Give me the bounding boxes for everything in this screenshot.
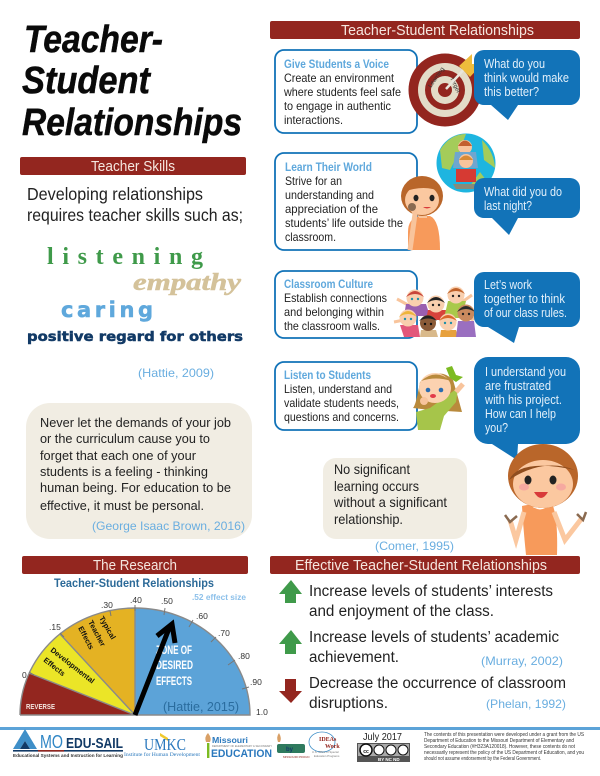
logo: IDEAs at Work: Education Programs — [314, 754, 340, 758]
panel: listen to students: validate students needs, — [284, 396, 399, 410]
panel: give students a voice: interactions. — [284, 113, 343, 127]
gauge chart: DESIRED — [156, 660, 193, 672]
gauge chart: Effects — [42, 655, 67, 678]
panel: give students a voice — [275, 50, 417, 133]
title: Student — [22, 60, 151, 102]
panel: George Isaac Brown quote: forget that each one of your — [40, 448, 197, 463]
heading: teacher-student relationships: Teacher-Student Relationships — [341, 23, 534, 39]
license badge: cc — [363, 749, 369, 755]
effect: interest: and enjoyment of the class. — [309, 603, 494, 620]
logo: IDEAs at Work: Work — [325, 744, 340, 750]
panel: learn their world: Learn Their World — [285, 162, 372, 174]
citation: Murray 2002: (Murray, 2002) — [481, 654, 563, 668]
logo: IDEAs at Work: U.S. Office of Special — [312, 750, 339, 754]
gauge chart: .70 — [218, 628, 230, 638]
panel: listen to students — [275, 362, 417, 430]
word: empathy: empathy — [133, 270, 241, 296]
effect: disruptions: Decrease the occurrence of classroom — [309, 675, 566, 692]
gauge chart: REVERSE — [26, 702, 55, 711]
speech bubble: class rules: together to think — [484, 292, 566, 306]
title: Teacher- — [24, 19, 163, 61]
gauge chart: Typical — [97, 614, 118, 641]
word: caring: caring — [61, 298, 153, 322]
panel: give students a voice: to engage in authentic — [284, 99, 391, 113]
panel: classroom culture: Establish connections — [284, 291, 387, 305]
disclaimer: The contents of this presentation were developed under a grant from the US — [424, 732, 585, 738]
heading: the research: The Research — [93, 558, 177, 574]
gauge chart: .80 — [238, 651, 250, 661]
panel: classroom culture: Classroom Culture — [284, 279, 373, 291]
heading: the research — [22, 556, 248, 574]
heading: effective relationships: Effective Teacher-Student Relationships — [295, 558, 547, 574]
panel: Comer quote: No significant — [334, 461, 410, 477]
panel: George Isaac Brown quote — [26, 403, 252, 539]
logo: Missouri Education: Missouri — [212, 736, 248, 745]
gauge chart: Developmental — [49, 645, 96, 685]
logo: MO EDU-SAIL — [13, 729, 123, 758]
citation: Phelan 1992: (Phelan, 1992) — [486, 697, 566, 711]
disclaimer — [424, 732, 585, 762]
speech bubble: what do you think — [474, 50, 580, 120]
logo: MO EDU-SAIL: Educational Systems and Instruction for Learning — [13, 753, 123, 758]
panel: give students a voice: Create an environment — [284, 71, 395, 85]
title: Relationships — [22, 102, 242, 144]
logo: UMKC: Institute for Human Development — [124, 751, 200, 758]
panel: George Isaac Brown quote: human being. For education to be — [40, 480, 231, 495]
illustration: teacher with open hands — [505, 444, 586, 555]
panel: Comer quote: learning occurs — [334, 478, 419, 494]
panel: effective teacher-student relationships — [270, 556, 580, 712]
logo: MO EDU-SAIL: EDU-SAIL — [66, 735, 123, 752]
logo: IDEAs at Work — [309, 732, 340, 758]
illustration: group of children — [394, 286, 479, 337]
gauge chart: Effects — [76, 625, 96, 651]
speech bubble: class rules: Let’s work — [484, 278, 533, 292]
gauge chart: .50 — [161, 596, 173, 606]
effect: achievement — [309, 629, 559, 666]
effect: interest: Increase levels of students’ interests — [309, 583, 553, 600]
logo: Missouri Education: EDUCATION — [211, 748, 272, 760]
logo: Missouri Education — [205, 733, 272, 760]
effect: achievement: achievement. — [309, 649, 399, 666]
intro text: requires teacher skills such as; — [27, 205, 243, 225]
speech bubble: class rules: of our class rules. — [484, 306, 567, 320]
title — [22, 19, 242, 144]
speech bubble: frustrated: How can I help — [485, 407, 556, 421]
logo: Missouri Education: DEPARTMENT OF ELEMENTARY & SECONDARY — [212, 744, 272, 748]
panel: classroom culture: the classroom walls. — [284, 319, 380, 333]
heading: teacher skills: Teacher Skills — [91, 159, 175, 175]
intro text: Developing relationships — [27, 184, 203, 204]
gauge chart: Teacher — [86, 619, 107, 648]
illustration: girl with raised hand — [413, 366, 463, 430]
footer logos — [13, 729, 340, 760]
effect: disruptions: disruptions. — [309, 695, 388, 712]
speech bubble: class rules — [474, 272, 580, 343]
icon: up arrow interest — [279, 580, 302, 603]
panel: learn their world: Strive for an — [285, 174, 342, 188]
panel: give students a voice: Give Students a Voice — [284, 59, 389, 71]
gauge chart: 1.0 — [256, 707, 268, 717]
effect: disruptions — [309, 675, 566, 712]
panel: Comer quote — [323, 458, 467, 553]
icon: globe with parent and child reading — [436, 134, 496, 192]
word: listening: listening — [47, 244, 203, 270]
icon: up arrow achievement — [279, 630, 302, 654]
speech bubble: what do you think: this better? — [484, 85, 539, 99]
logo: 1 by 20 partner — [277, 733, 310, 759]
panel: George Isaac Brown quote: students is a feeling - thinking — [40, 464, 208, 479]
panel: classroom culture — [275, 271, 417, 338]
disclaimer: necessarily represent the policy of the US Department of Education, and you — [424, 750, 584, 756]
intro text — [27, 184, 243, 225]
panel: Comer quote: without a significant — [333, 494, 447, 510]
gauge chart: EFFECTS — [156, 676, 192, 688]
gauge chart: .90 — [250, 677, 262, 687]
panel: George Isaac Brown quote: effective, it must be personal. — [40, 498, 204, 513]
effect: interest — [309, 583, 553, 620]
panel: teacher skills — [20, 157, 246, 380]
panel: George Isaac Brown quote: (George Isaac Brown, 2016) — [92, 519, 245, 533]
gauge chart: ZONE OF — [156, 645, 192, 657]
panel: learn their world — [275, 153, 417, 250]
license badge: BY NC ND — [378, 757, 400, 762]
speech bubble: what do you think: What do you — [484, 57, 545, 71]
illustration: teacher thinking — [401, 176, 443, 250]
icon: target with arrow — [408, 54, 482, 126]
effect size note: .52 effect size — [192, 592, 246, 602]
speech bubble: frustrated: you? — [485, 421, 508, 435]
effect: achievement: Increase levels of students’ academic — [309, 629, 559, 646]
panel: George Isaac Brown quote: Never let the demands of your job — [40, 415, 231, 430]
speech bubble: what did you do — [474, 178, 580, 235]
logo: UMKC: UMKC — [144, 735, 186, 754]
panel: learn their world: appreciation of the — [285, 202, 378, 216]
logo: 1 by 20 partner: by — [286, 747, 294, 753]
speech bubble: frustrated: I understand you — [485, 365, 566, 379]
speech bubble: what do you think: think would make — [484, 71, 569, 85]
gauge chart: (Hattie, 2015) — [163, 699, 239, 714]
speech bubble: what did you do: What did you do — [484, 185, 562, 199]
license badge — [357, 743, 410, 762]
speech bubble: what did you do: last night? — [484, 199, 532, 213]
logo: UMKC — [124, 733, 200, 758]
icon: down arrow disruptions — [279, 679, 302, 703]
panel: learn their world: students’ life outside the — [285, 216, 403, 230]
panel: Comer quote: (Comer, 1995) — [375, 539, 454, 553]
speech bubble: frustrated: with his project. — [484, 393, 562, 407]
panel: learn their world: understanding and — [285, 188, 374, 202]
citation: Hattie 2009: (Hattie, 2009) — [138, 366, 214, 380]
icon: target with arrow: Learning — [428, 67, 446, 89]
gauge chart: 0 — [22, 670, 27, 680]
gauge chart — [20, 595, 268, 717]
logo: IDEAs at Work: IDEAs — [319, 737, 337, 743]
logo: MO EDU-SAIL: MO — [40, 732, 63, 752]
disclaimer: Department of Education to the Missouri Department of Elementary and — [424, 738, 574, 744]
panel: listen to students: Listen to Students — [284, 370, 371, 382]
heading: teacher-student relationships — [270, 21, 580, 39]
panel: listen to students: Listen, understand and — [284, 382, 392, 396]
disclaimer: Secondary Education (#H323A120018). However, these contents do not — [424, 744, 576, 750]
logo: 1 by 20 partner: MISSOURI PROUD — [283, 755, 310, 759]
gauge chart: .15 — [49, 622, 61, 632]
panel: listen to students: questions and concerns. — [284, 410, 399, 424]
gauge chart: .40 — [130, 595, 142, 605]
panel: give students a voice: where students feel safe — [283, 85, 401, 99]
speech bubble: frustrated — [474, 357, 580, 460]
panel: classroom culture: and belonging within — [284, 305, 384, 319]
icon: target with arrow: Target — [448, 76, 461, 94]
date: July 2017 — [363, 732, 402, 743]
gauge chart: .30 — [101, 600, 113, 610]
disclaimer: should not assume endorsement by the Federal Government. — [424, 756, 541, 762]
heading: teacher skills — [20, 157, 246, 175]
panel: Comer quote: relationship. — [334, 511, 403, 527]
word: positive regard for others: positive regard for others — [27, 329, 243, 345]
chart title: Teacher-Student Relationships — [54, 576, 214, 590]
speech bubble: frustrated: are frustrated — [485, 379, 551, 393]
panel: the research — [20, 556, 268, 717]
gauge chart: .60 — [196, 611, 208, 621]
panel: learn their world: classroom. — [285, 230, 336, 244]
panel: George Isaac Brown quote: or the curriculum cause you to — [40, 431, 210, 446]
